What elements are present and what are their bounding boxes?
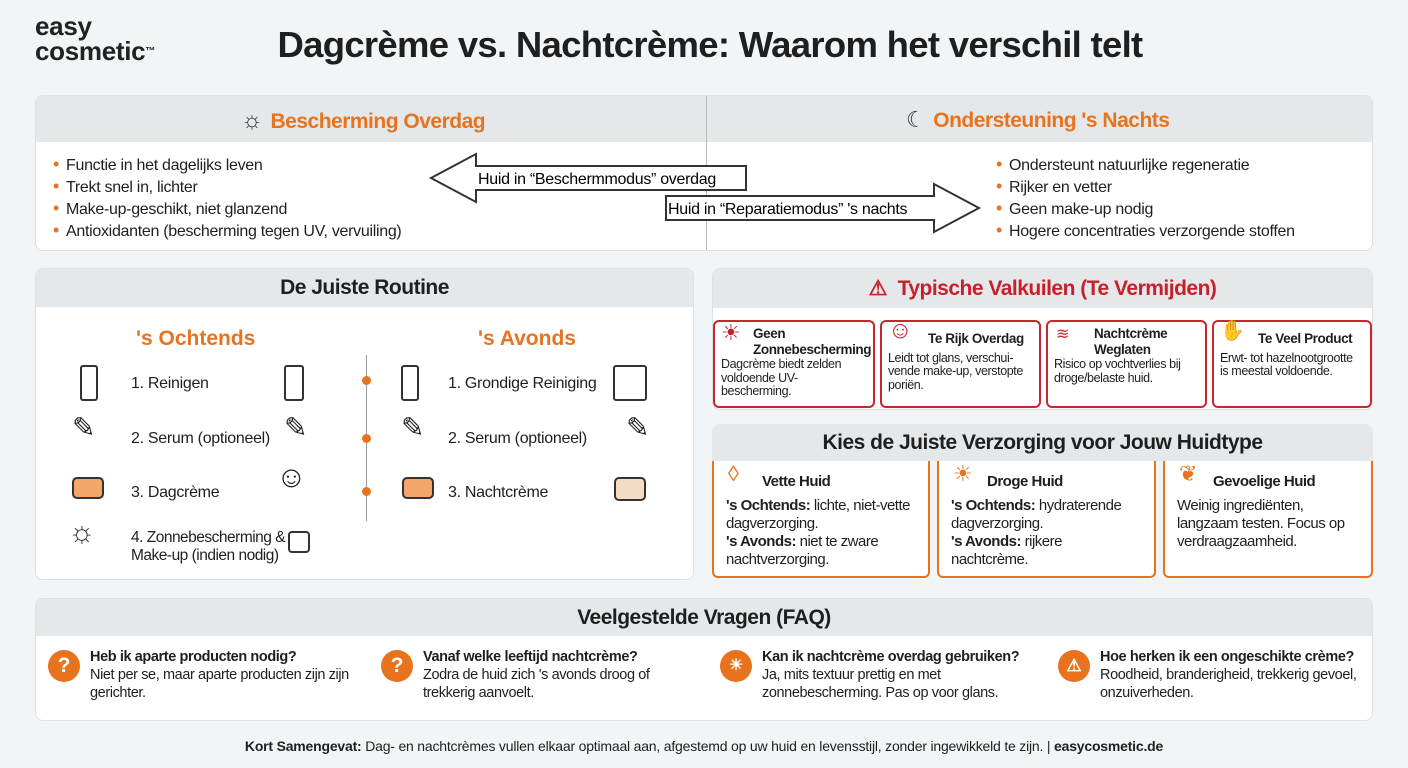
card 1 (713, 320, 875, 408)
panel: FAQ (35, 598, 1373, 721)
night bullets: Rijker en vetter (1009, 179, 1112, 196)
panel: routine: 3. Dagcrème (131, 484, 219, 501)
faq 4: Hoe herken ik een ongeschikte crème? (1100, 649, 1354, 665)
card 2: Te Rijk Overdag (928, 331, 1024, 346)
faq 1 (48, 649, 349, 701)
card 3: ≋ (1056, 326, 1069, 343)
card dry: Droge Huid (987, 473, 1063, 490)
card 4: Erwt- tot hazelnootgrootte is meestal voldoende. (1220, 350, 1353, 378)
faq 3: Kan ik nachtcrème overdag gebruiken? (762, 649, 1019, 665)
panel: routine: 2. Serum (optioneel) (448, 430, 587, 447)
card 1: ☀ (721, 320, 740, 345)
day bullets: Make-up-geschikt, niet glanzend (66, 201, 287, 218)
night bullets (996, 157, 1295, 240)
faq 2: Zodra de huid zich 's avonds droog of trekkerig aanvoelt. (423, 667, 650, 701)
panel: pitfalls: ⚠ Typische Valkuilen (Te Vermijden) (869, 277, 1216, 300)
logo (35, 11, 155, 66)
panel: day vs night (35, 95, 1373, 251)
card 1: Zonnebescherming (753, 342, 871, 357)
heading: day: ☼ Bescherming Overdag (241, 107, 485, 134)
card dry: ☀ (953, 461, 972, 486)
card 2 (880, 320, 1041, 408)
panel: routine: 2. Serum (optioneel) (131, 430, 270, 447)
faq 1: Heb ik aparte producten nodig? (90, 649, 296, 665)
panel: routine: 3. Nachtcrème (448, 484, 548, 501)
night bullets: Ondersteunt natuurlijke regeneratie (1009, 157, 1249, 174)
panel: routine: De Juiste Routine (280, 276, 449, 299)
card oily: Vette Huid (762, 473, 830, 490)
panel: routine: 4. Zonnebescherming & (131, 529, 285, 546)
faq 3 (720, 649, 1019, 701)
card oily: ◊ (728, 461, 738, 486)
day bullets (54, 157, 401, 240)
card 3: Nachtcrème (1094, 326, 1167, 341)
heading morning: 's Ochtends (136, 327, 255, 350)
night bullets: Hogere concentraties verzorgende stoffen (1009, 223, 1295, 240)
panel: routine: ✎ (626, 412, 649, 443)
card 2: ☺ (888, 317, 912, 344)
card 1: Geen (753, 326, 785, 341)
panel: skin types (712, 424, 1373, 578)
panel: routine: ☺ (276, 461, 306, 494)
faq 1: ? (58, 654, 70, 677)
card sensitive: Gevoelige Huid (1213, 473, 1315, 490)
faq 4 (1058, 649, 1356, 701)
arrows: Huid in “Reparatiemodus” 's nachts (668, 201, 907, 218)
panel: skin types: Kies de Juiste Verzorging voor Jouw Huidtype (822, 430, 1263, 454)
header band (36, 96, 1372, 142)
footer summary: Kort Samengevat: Dag- en nachtcrèmes vullen elkaar optimaal aan, afgestemd op uw huid en levensstijl, zonder ingewikkeld te zijn. | easycosmetic.de (245, 738, 1163, 754)
logo: cosmetic™ (35, 36, 155, 66)
faq 1: Niet per se, maar aparte producten zijn zijn gerichter. (90, 667, 349, 701)
panel: routine (35, 268, 694, 580)
card oily: 's Ochtends: lichte, niet-vette dagverzorging. (726, 497, 910, 532)
card dry: 's Avonds: rijkere nachtcrème. (951, 533, 1062, 568)
faq 4: ⚠ (1066, 656, 1082, 675)
card oily: 's Avonds: niet te zware nachtverzorging. (726, 533, 878, 568)
faq 3: Ja, mits textuur prettig en met zonnebescherming. Pas op voor glans. (762, 667, 998, 701)
faq 4: Roodheid, branderigheid, trekkerig gevoel, onzuiverheden. (1100, 667, 1356, 701)
card oily (712, 461, 930, 578)
card 3: Risico op vochtverlies bij droge/belaste huid. (1054, 357, 1180, 384)
title: Dagcrème vs. Nachtcrème: Waarom het verschil telt (277, 24, 1143, 65)
faq 2: ? (391, 654, 403, 677)
panel: routine: ✎ (284, 412, 307, 443)
card sensitive: ❦ (1179, 461, 1197, 486)
panel: routine: Make-up (indien nodig) (131, 547, 279, 564)
arrows (429, 152, 981, 234)
heading: night: ☾ Ondersteuning 's Nachts (906, 107, 1169, 132)
faq 2 (381, 649, 650, 701)
panel: routine: ✎ (72, 412, 95, 443)
card dry (937, 461, 1156, 578)
night bullets: Geen make-up nodig (1009, 201, 1153, 218)
card 3: Weglaten (1094, 342, 1151, 357)
panel: routine: 1. Grondige Reiniging (448, 375, 596, 392)
card dry: 's Ochtends: hydraterende dagverzorging. (951, 497, 1121, 532)
panel: routine: ✎ (401, 412, 424, 443)
card sensitive: Weinig ingrediënten, langzaam testen. Focus op verdraagzaamheid. (1177, 497, 1345, 550)
panel: pitfalls (712, 268, 1373, 410)
day bullets: Antioxidanten (bescherming tegen UV, vervuiling) (66, 223, 401, 240)
day bullets: Trekt snel in, lichter (66, 179, 198, 196)
panel: routine: 1. Reinigen (131, 375, 209, 392)
card 3 (1046, 320, 1207, 408)
card 1: Dagcrème biedt zelden voldoende UV-bescherming. (721, 357, 841, 398)
day bullets: Functie in het dagelijks leven (66, 157, 262, 174)
morning steps (80, 365, 98, 401)
logo: easy (35, 11, 92, 41)
faq 2: Vanaf welke leeftijd nachtcrème? (423, 649, 637, 665)
card 4: Te Veel Product (1258, 331, 1352, 346)
evening steps (401, 365, 419, 401)
card 4 (1212, 320, 1372, 408)
faq 3: ☀ (729, 657, 743, 674)
panel: FAQ: Veelgestelde Vragen (FAQ) (577, 606, 831, 628)
card sensitive (1163, 461, 1373, 578)
card 2: Leidt tot glans, verschui-vende make-up, verstopte poriën. (888, 350, 1023, 392)
card 4: ✋ (1220, 320, 1245, 342)
heading evening: 's Avonds (478, 327, 576, 350)
panel: routine: ☼ (68, 516, 95, 549)
arrows: Huid in “Beschermmodus” overdag (478, 171, 716, 188)
